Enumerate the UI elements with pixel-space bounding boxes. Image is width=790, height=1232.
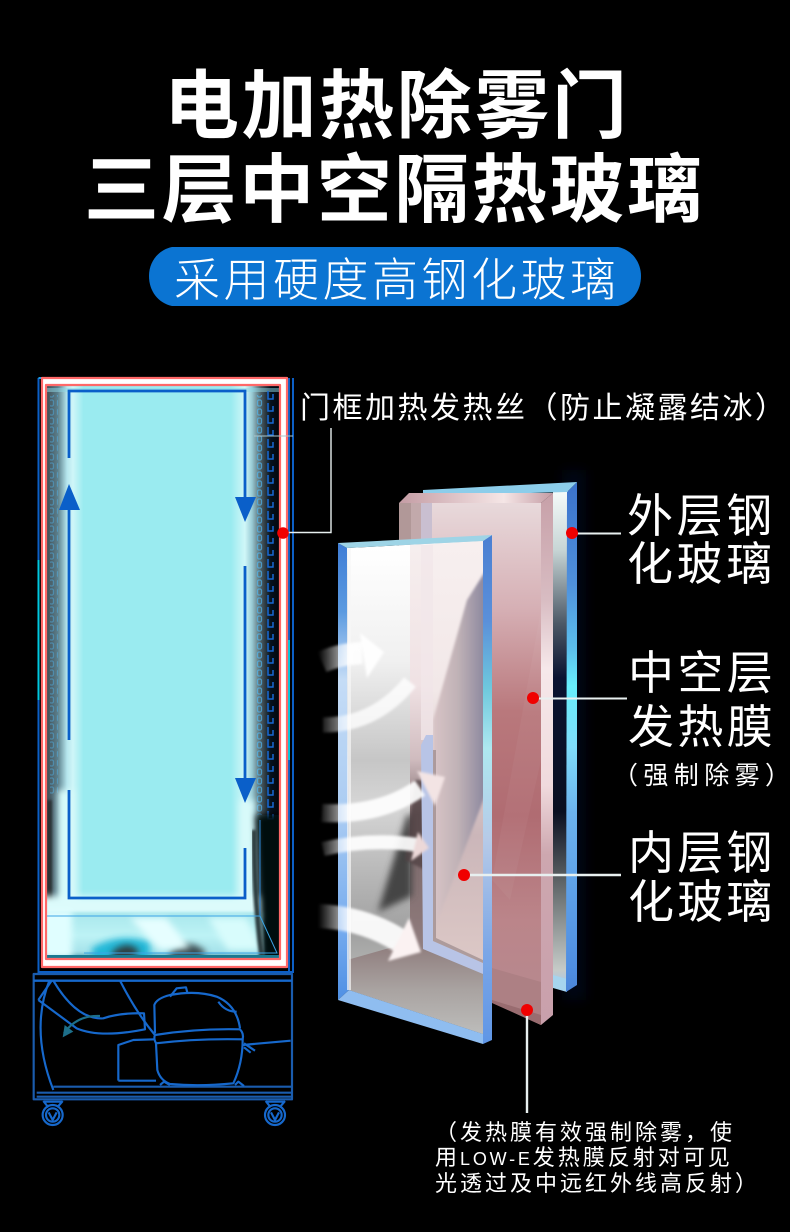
arrow 1 [322, 633, 384, 678]
middle heating film pane [399, 493, 553, 1025]
cabinet interior glow [40, 385, 284, 962]
airflow circuit arrows [59, 391, 256, 898]
arrow 2 [323, 682, 410, 725]
callout leader lines [283, 428, 627, 1113]
label: inner tempered glass [628, 827, 776, 928]
label: inner tempered glass: 化玻璃 [628, 876, 776, 928]
three-layer glass illustration [318, 470, 586, 1044]
title: 三层中空隔热玻璃 [84, 148, 705, 232]
label: outer tempered glass [627, 490, 776, 590]
label: hollow layer heating film: （强制除雾） [613, 762, 790, 790]
label: hollow layer heating film: 发热膜 [628, 701, 776, 753]
casters [43, 1101, 285, 1125]
footnote text: 光透过及中远红外线高反射） [435, 1171, 760, 1196]
inner tempered glass pane [338, 535, 492, 1044]
red and white heating frame [42, 378, 287, 967]
cabinet outer blue outline [38, 378, 293, 972]
arrow 5 [318, 916, 421, 961]
display cabinet illustration [34, 378, 293, 1125]
subtitle pill: 采用硬度高钢化玻璃 [174, 254, 620, 306]
label: hollow layer heating film: 中空层 [628, 647, 776, 699]
footnote text: 用LOW-E发热膜反射对可见 [435, 1145, 733, 1170]
label: outer tempered glass: 外层钢 [627, 490, 776, 542]
door frame heating wire label: 门框加热发热丝（防止凝露结冰） [300, 392, 788, 425]
arrow 3 [322, 771, 445, 813]
label: hollow layer heating film [613, 647, 790, 790]
arrow 4 [323, 832, 429, 861]
callout dots [277, 527, 578, 1016]
frame callout tick [254, 435, 293, 437]
label: inner tempered glass: 内层钢 [628, 827, 776, 879]
airflow arrows through glass [318, 633, 445, 961]
footnote text: （发热膜有效强制除雾，使 [435, 1120, 735, 1145]
label: outer tempered glass: 化玻璃 [627, 538, 776, 590]
outer tempered glass pane [423, 470, 586, 1000]
footnote text [435, 1120, 760, 1196]
title: 电加热除雾门 [164, 64, 630, 148]
compressor compartment [34, 974, 292, 1125]
title [84, 64, 705, 232]
